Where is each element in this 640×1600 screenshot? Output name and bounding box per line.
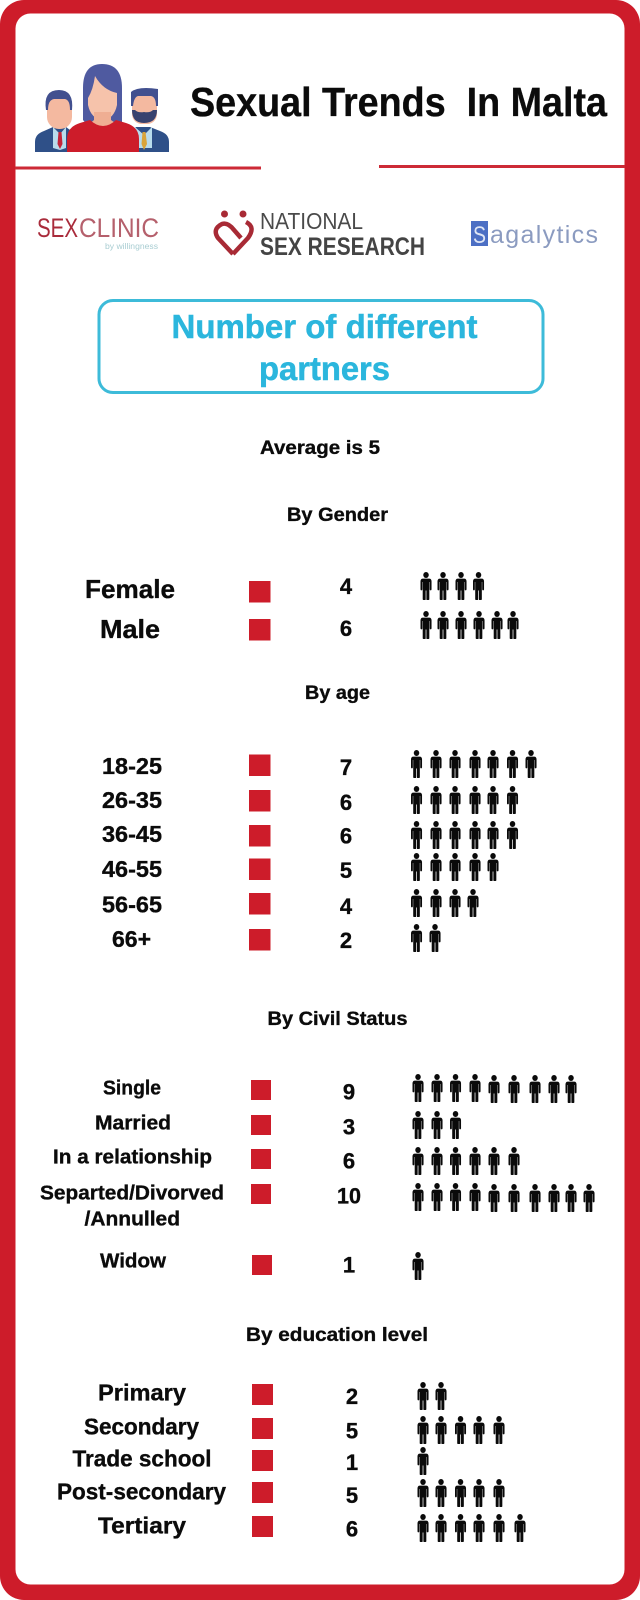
row: 56-65 bbox=[102, 889, 479, 919]
row: primary: Primary bbox=[98, 1380, 186, 1406]
row: secondary: 5 bbox=[346, 1418, 358, 1444]
row: male: Male bbox=[100, 614, 160, 644]
row: widow: Widow bbox=[100, 1250, 166, 1272]
heading: by gender: By Gender bbox=[287, 505, 389, 526]
row: 36-45 bbox=[102, 821, 518, 849]
row: secondary: Secondary bbox=[84, 1414, 199, 1440]
row: 66+: 66+ bbox=[112, 926, 151, 952]
logo: National Sex Research: NATIONAL bbox=[260, 208, 363, 234]
callout: number of different partners bbox=[99, 300, 543, 392]
callout: number of different partners: Number of different bbox=[172, 308, 478, 345]
row: 26-35 bbox=[102, 786, 518, 815]
row: separated/divorced/annulled: /Annulled bbox=[84, 1208, 180, 1230]
logo: Sex Clinic: CLINIC bbox=[79, 213, 159, 243]
row: male bbox=[100, 611, 519, 644]
row: primary bbox=[98, 1380, 447, 1410]
logo: Sagalytics: S bbox=[473, 222, 486, 249]
row: single: 9 bbox=[343, 1080, 355, 1104]
row: post-secondary: 5 bbox=[346, 1483, 358, 1508]
row: post-secondary: Post-secondary bbox=[57, 1478, 226, 1504]
row: tertiary: Tertiary bbox=[98, 1512, 186, 1538]
title: Sexual Trends In Malta bbox=[190, 79, 608, 125]
row: married: Married bbox=[95, 1112, 171, 1134]
row: 36-45: 36-45 bbox=[102, 821, 162, 847]
logo: Sex Clinic bbox=[37, 213, 159, 251]
row: separated/divorced/annulled: 10 bbox=[337, 1184, 361, 1208]
row: 56-65: 56-65 bbox=[102, 892, 162, 918]
row: 46-55 bbox=[102, 853, 499, 883]
row: secondary bbox=[84, 1414, 505, 1444]
heading: by age: By age bbox=[305, 683, 370, 704]
row: 18-25: 7 bbox=[340, 755, 352, 780]
logo: National Sex Research bbox=[216, 208, 425, 261]
row: in a relationship: 6 bbox=[343, 1148, 355, 1174]
row: widow: 1 bbox=[343, 1252, 355, 1278]
row: primary: 2 bbox=[346, 1384, 358, 1409]
row: separated/divorced/annulled: Separted/Divorved bbox=[40, 1182, 224, 1204]
row: trade school bbox=[72, 1446, 429, 1475]
row: 56-65: 4 bbox=[340, 894, 353, 919]
icon: three people bbox=[35, 64, 169, 152]
logo: Sex Clinic: by willingness bbox=[105, 241, 158, 251]
logo: Sex Clinic: SEX bbox=[37, 213, 78, 243]
row: tertiary bbox=[98, 1512, 526, 1542]
row: 18-25: 18-25 bbox=[102, 753, 162, 779]
row: in a relationship: In a relationship bbox=[53, 1146, 212, 1168]
row: 66+: 2 bbox=[340, 928, 352, 953]
row: 36-45: 6 bbox=[340, 824, 352, 848]
row: married bbox=[95, 1111, 461, 1140]
row: female: 4 bbox=[340, 574, 353, 599]
row: trade school: Trade school bbox=[72, 1446, 212, 1472]
heading: by civil status: By Civil Status bbox=[268, 1009, 408, 1030]
row: separated/divorced/annulled bbox=[40, 1182, 595, 1230]
row: trade school: 1 bbox=[346, 1450, 358, 1475]
icon: heart with two dots bbox=[216, 210, 252, 254]
row: post-secondary bbox=[57, 1478, 505, 1508]
header divider lines bbox=[15, 165, 625, 170]
logo: Sagalytics: agalytics bbox=[490, 221, 598, 249]
row: 26-35: 6 bbox=[340, 790, 352, 815]
row: 66+ bbox=[112, 924, 441, 953]
row: widow bbox=[100, 1250, 424, 1280]
row: 26-35: 26-35 bbox=[102, 787, 162, 813]
row: married: 3 bbox=[343, 1114, 355, 1140]
logo: National Sex Research: SEX RESEARCH bbox=[260, 233, 425, 261]
row: single bbox=[103, 1074, 577, 1104]
right man bbox=[132, 127, 169, 152]
row: 46-55: 5 bbox=[340, 858, 352, 883]
row: 18-25 bbox=[102, 750, 537, 780]
row: female bbox=[85, 572, 484, 604]
woman bbox=[83, 64, 122, 128]
callout: number of different partners: partners bbox=[259, 350, 390, 387]
row: tertiary: 6 bbox=[346, 1516, 358, 1542]
heading: by education level: By education level bbox=[246, 1325, 428, 1346]
row: male: 6 bbox=[340, 616, 352, 641]
row: female: Female bbox=[85, 574, 175, 604]
row: in a relationship bbox=[53, 1146, 520, 1175]
row: single: Single bbox=[103, 1078, 161, 1100]
row: 46-55: 46-55 bbox=[102, 856, 162, 882]
left man bbox=[35, 127, 70, 152]
text: average: Average is 5 bbox=[260, 438, 380, 459]
